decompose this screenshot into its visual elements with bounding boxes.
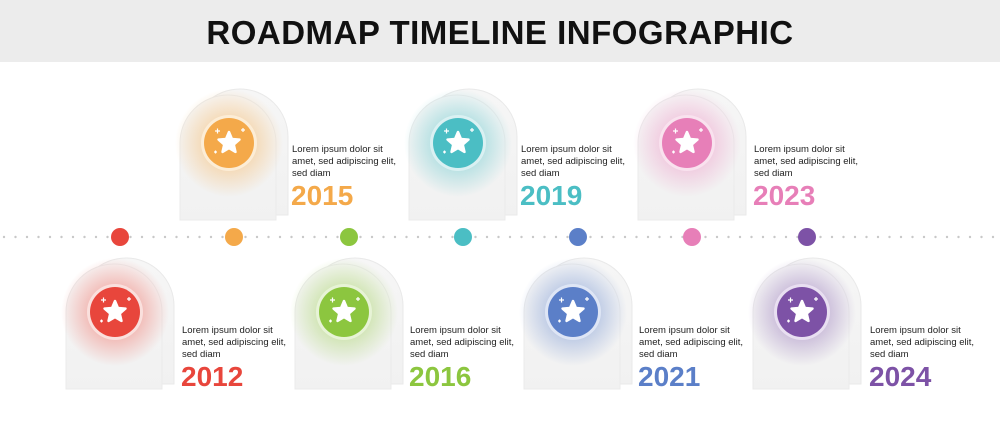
milestone 2019: Lorem ipsum dolor sit bbox=[521, 144, 612, 155]
milestone 2016: sed diam bbox=[410, 349, 449, 360]
milestone 2015: Lorem ipsum dolor sit bbox=[292, 144, 383, 155]
milestone 2023: Lorem ipsum dolor sit bbox=[754, 144, 845, 155]
milestone 2015: 2015 bbox=[291, 180, 353, 211]
milestone 2016: 2016 bbox=[409, 361, 471, 392]
milestone 2019: 2019 bbox=[520, 180, 582, 211]
milestone 2023: sed diam bbox=[754, 168, 793, 179]
milestone 2012: amet, sed adipiscing elit, bbox=[182, 337, 286, 348]
title: ROADMAP TIMELINE INFOGRAPHIC bbox=[206, 14, 794, 51]
milestone 2019: amet, sed adipiscing elit, bbox=[521, 156, 625, 167]
milestone 2021: sed diam bbox=[639, 349, 678, 360]
milestone 2019 bbox=[404, 89, 625, 220]
milestone 2016: Lorem ipsum dolor sit bbox=[410, 325, 501, 336]
timeline markers bbox=[111, 228, 816, 246]
milestone 2021: Lorem ipsum dolor sit bbox=[639, 325, 730, 336]
milestone 2016 bbox=[290, 258, 514, 392]
milestone 2021 bbox=[519, 258, 743, 392]
milestone 2023: 2023 bbox=[753, 180, 815, 211]
milestone 2024: amet, sed adipiscing elit, bbox=[870, 337, 974, 348]
milestone 2012: 2012 bbox=[181, 361, 243, 392]
milestone 2021: amet, sed adipiscing elit, bbox=[639, 337, 743, 348]
milestone 2023 bbox=[633, 89, 858, 220]
milestone 2015 bbox=[175, 89, 396, 220]
milestone 2024: Lorem ipsum dolor sit bbox=[870, 325, 961, 336]
milestone 2015: sed diam bbox=[292, 168, 331, 179]
timeline dotted line bbox=[4, 236, 998, 238]
milestone 2012: Lorem ipsum dolor sit bbox=[182, 325, 273, 336]
milestone 2024: 2024 bbox=[869, 361, 932, 392]
milestone 2023: amet, sed adipiscing elit, bbox=[754, 156, 858, 167]
milestone 2012: sed diam bbox=[182, 349, 221, 360]
milestone 2015: amet, sed adipiscing elit, bbox=[292, 156, 396, 167]
milestone 2019: sed diam bbox=[521, 168, 560, 179]
milestone 2021: 2021 bbox=[638, 361, 700, 392]
header band bbox=[0, 0, 1000, 62]
milestone 2024 bbox=[748, 258, 974, 392]
milestone 2016: amet, sed adipiscing elit, bbox=[410, 337, 514, 348]
milestone 2012 bbox=[61, 258, 286, 392]
milestone 2024: sed diam bbox=[870, 349, 909, 360]
